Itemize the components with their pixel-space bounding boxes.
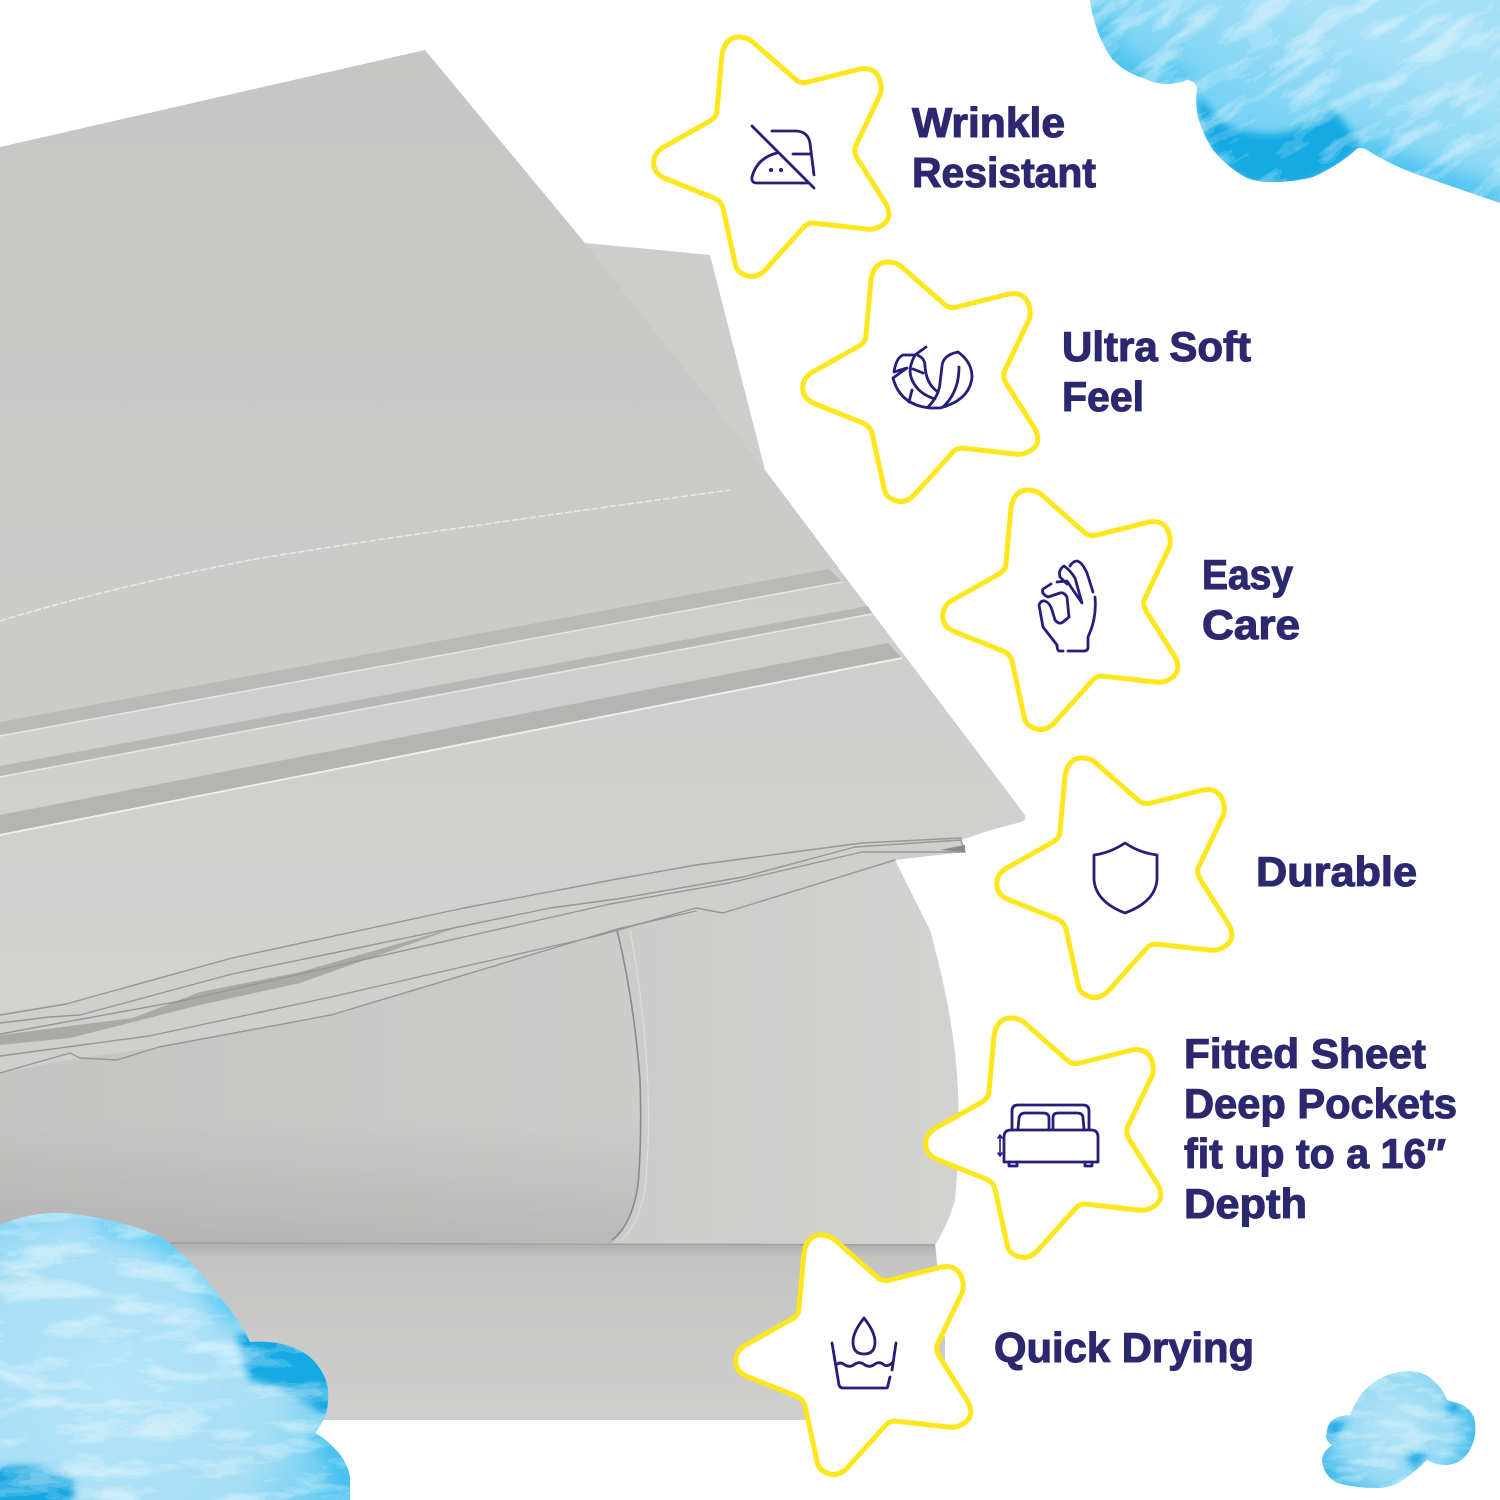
band top blend <box>0 470 840 722</box>
hem highlight <box>622 930 649 1240</box>
stripe three stitch <box>0 658 902 835</box>
label: Ultra Soft <box>1062 323 1251 370</box>
icon: shield <box>1094 843 1157 913</box>
cloud C texture <box>1322 1371 1473 1488</box>
star badge <box>997 758 1232 998</box>
feature: Durable <box>997 758 1417 998</box>
upper flap <box>0 50 840 722</box>
label: Resistant <box>912 149 1096 196</box>
cloud B right edge tone <box>315 1433 350 1500</box>
label: Quick Drying <box>994 1324 1254 1371</box>
fold line four <box>0 860 895 1056</box>
star badge <box>803 262 1038 502</box>
dashed stitch <box>0 490 730 621</box>
star badge <box>654 37 889 277</box>
star badge <box>926 1018 1161 1258</box>
front band <box>0 570 1026 1015</box>
icon: OK hand <box>1039 561 1095 651</box>
fold shadow line <box>170 1243 935 1245</box>
icon: bed with depth arrow <box>998 1105 1098 1166</box>
fold line five <box>0 911 696 1073</box>
stripe one <box>0 569 842 735</box>
cloud B edge tone <box>100 1220 240 1323</box>
cloud: top right watercolor <box>1090 0 1500 203</box>
stripe two <box>0 606 872 776</box>
icon: feather and cotton <box>893 347 972 408</box>
cloud C darker patches <box>1325 1392 1465 1470</box>
label: Feel <box>1062 373 1144 420</box>
stripe stitch lines <box>0 582 872 777</box>
label <box>1062 323 1251 420</box>
back pillowcase <box>585 243 765 480</box>
cloud B texture <box>0 1205 355 1500</box>
label <box>1202 551 1300 648</box>
cloud B dark bottom corner <box>0 1466 75 1500</box>
cloud A deep edge <box>1197 95 1362 190</box>
sheet hem seam <box>612 930 641 1240</box>
star badge <box>736 1235 971 1475</box>
label <box>912 99 1096 196</box>
dark gap in stack <box>0 925 464 1045</box>
cloud B dark right lobe <box>235 1333 335 1425</box>
icon: crossed out iron <box>752 126 814 188</box>
label: Depth <box>1184 1180 1307 1227</box>
fold lines <box>0 838 961 1015</box>
folded fabric stack <box>0 805 1015 1073</box>
label <box>1184 1030 1457 1227</box>
label: Easy <box>1202 551 1294 598</box>
label: Wrinkle <box>912 99 1065 146</box>
feature: Fitted Sheet Deep Pockets <box>926 1018 1457 1258</box>
stripe three <box>0 643 902 835</box>
label: Fitted Sheet <box>1184 1030 1426 1077</box>
feature: Wrinkle Resistant <box>654 37 1096 277</box>
fold line two <box>0 840 965 1023</box>
product photo: folded grey sheet set <box>0 50 1026 1420</box>
stack tip shadow <box>940 845 965 852</box>
cloud A texture <box>1090 0 1500 198</box>
cloud A edge tone <box>1090 0 1500 203</box>
label: fit up to a 16″ <box>1184 1130 1446 1177</box>
icon: water drop over basin <box>832 1318 896 1388</box>
feature: Easy Care <box>943 490 1300 730</box>
label: Durable <box>1256 848 1417 895</box>
feature: Quick Drying <box>736 1235 1254 1475</box>
fold line three <box>0 852 965 1034</box>
label: Care <box>1202 601 1300 648</box>
cloud: small bottom right <box>1322 1371 1476 1488</box>
feature: Ultra Soft Feel <box>803 262 1251 502</box>
label: Deep Pockets <box>1184 1080 1457 1127</box>
bottom folded sheet <box>0 1240 945 1420</box>
cloud: bottom left watercolor <box>0 1205 355 1500</box>
star badge <box>943 490 1178 730</box>
middle folded sheet <box>0 860 959 1245</box>
lower left shading <box>0 1120 640 1243</box>
